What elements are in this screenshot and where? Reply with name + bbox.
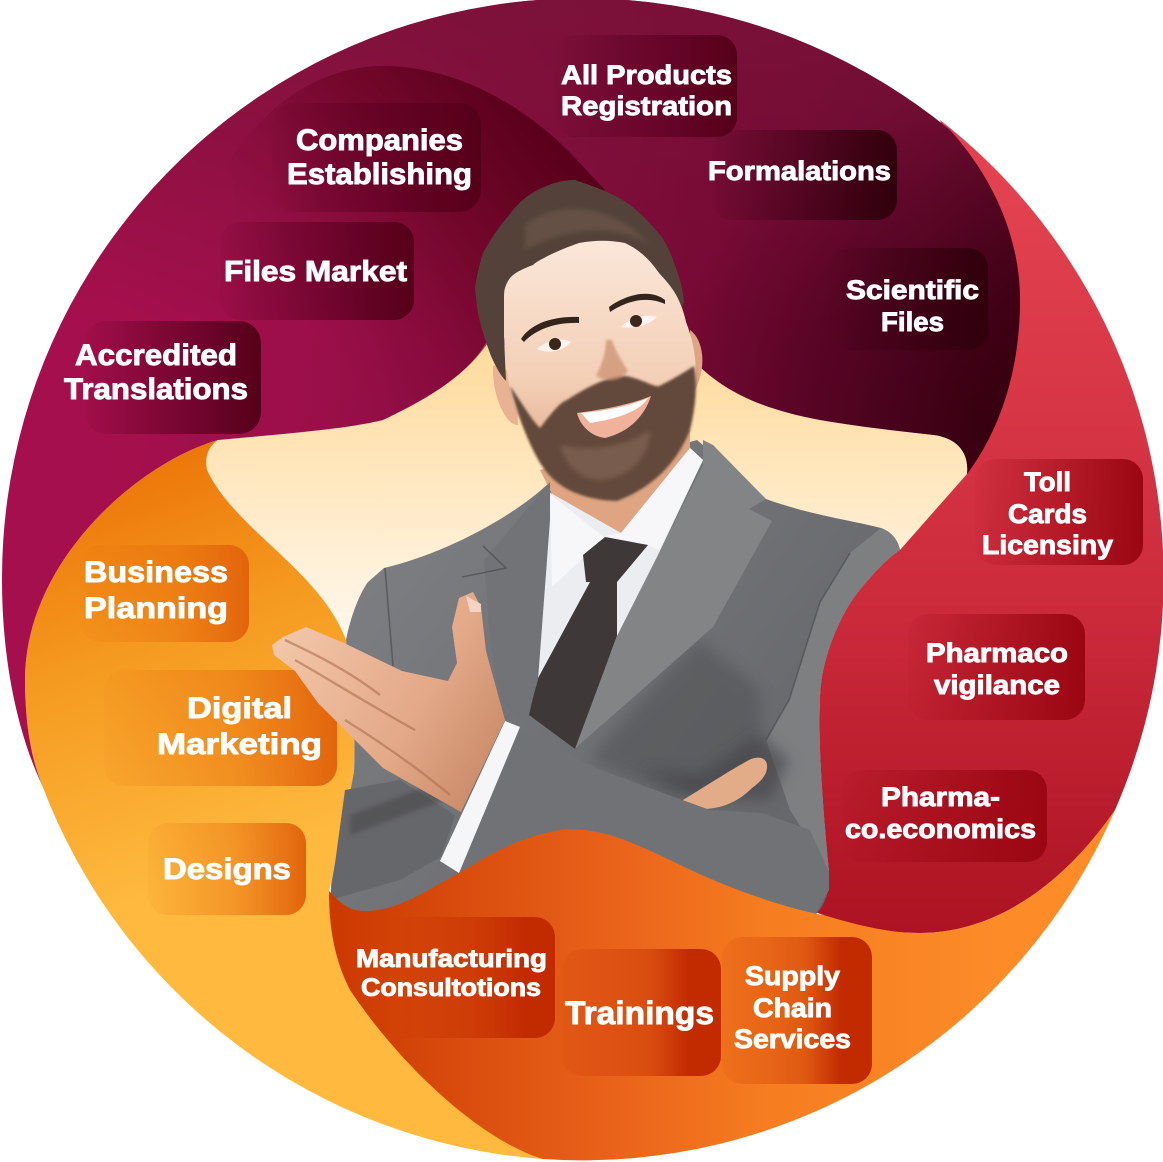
pill: All Products Registration: All Products [561,60,732,90]
pill: All Products Registration: Registration [561,91,732,121]
shirt cuff [440,721,520,873]
pill: Toll Cards Licensiny: Licensiny [982,530,1113,560]
pill: Manufacturing Consultotions: Manufacturing [356,945,547,973]
pill: Supply Chain Services: Chain [753,993,832,1023]
presenting hand [272,592,505,812]
segment: maroon top and left [2,0,1020,785]
pill: Toll Cards Licensiny: Cards [1008,499,1087,529]
chest shadow [590,640,760,800]
beard [510,366,696,501]
ear right [690,330,702,395]
pill: Companies Establishing [272,103,481,212]
thumbnail [466,596,481,612]
pill: Pharmacoeconomics: co.economics [845,814,1036,844]
pill: All Products Registration [555,35,737,137]
man figure [330,180,900,915]
pill: Formalations [708,130,897,220]
pill: Trainings: Trainings [565,995,714,1031]
pill: Digital Marketing: Marketing [157,728,322,761]
pill: Accredited Translations: Translations [64,373,248,406]
pill: Business Planning [80,545,249,642]
face [503,239,696,501]
pill: Pharmacovigilance: vigilance [934,670,1060,700]
pill: Pharmacovigilance [908,614,1085,720]
finger lines [285,640,450,795]
left lapel [484,482,550,725]
segment: orange bottom [329,810,1115,1160]
pill: Pharmacoeconomics [842,770,1047,862]
left eye [537,340,571,352]
jacket seams [385,546,850,740]
pill: Accredited Translations: Accredited [75,339,237,372]
neck [540,430,690,536]
pill: Business Planning: Business [84,556,228,589]
forearm fold shadow [640,735,790,800]
left brow [521,317,579,342]
teeth [581,398,648,423]
crossed forearm [440,730,829,915]
segment: yellow-orange left [25,440,543,1159]
pill: Supply Chain Services [722,937,872,1084]
pill: Trainings [562,949,721,1076]
shirt collar right [605,448,703,550]
pill: Business Planning: Planning [84,592,228,625]
pill: Toll Cards Licensiny: Toll [1024,467,1071,497]
pill: Accredited Translations [64,321,261,434]
pill: Scientific Files [830,248,988,350]
pill: Files Market: Files Market [224,256,407,288]
pill: Designs: Designs [163,853,291,886]
shirt collar left [550,494,605,587]
pill: Manufacturing Consultotions [345,917,555,1038]
nose shadow [596,340,628,380]
pill: Digital Marketing: Digital [187,692,292,725]
pill: Scientific Files: Scientific [846,275,979,305]
ear left [493,366,518,425]
pill: Toll Cards Licensiny [975,459,1143,565]
pill: Scientific Files: Files [881,307,944,337]
center cream background [190,330,985,920]
left sleeve lower [330,780,455,900]
hair [475,180,684,381]
segment: red right [815,120,1163,933]
segment: dark lobe behind Companies Establishing [230,66,605,420]
right brow [609,294,665,312]
hair highlight [525,209,650,250]
right sleeve [766,528,900,872]
sleeve fold [350,785,445,835]
pill: Files Market [220,222,414,320]
pill: Designs [148,823,306,915]
pill: Supply Chain Services: Services [734,1024,851,1054]
right lapel [575,440,772,749]
pill: Pharmacovigilance: Pharmaco [926,638,1068,668]
right hand [678,758,767,809]
pill: Formalations: Formalations [708,156,891,186]
right eye [621,316,657,328]
beard lighter chin [560,430,650,480]
pill: Companies Establishing: Establishing [287,158,472,191]
mouth [577,396,651,438]
pill: Companies Establishing: Companies [296,124,463,157]
tie [529,537,648,749]
jacket [330,440,900,915]
pill: Pharmacoeconomics: Pharma- [881,782,1000,812]
shirt [533,448,703,700]
pill: Supply Chain Services: Supply [745,961,840,991]
pill: Manufacturing Consultotions: Consultotions [361,974,541,1002]
pill: Digital Marketing [104,670,337,786]
